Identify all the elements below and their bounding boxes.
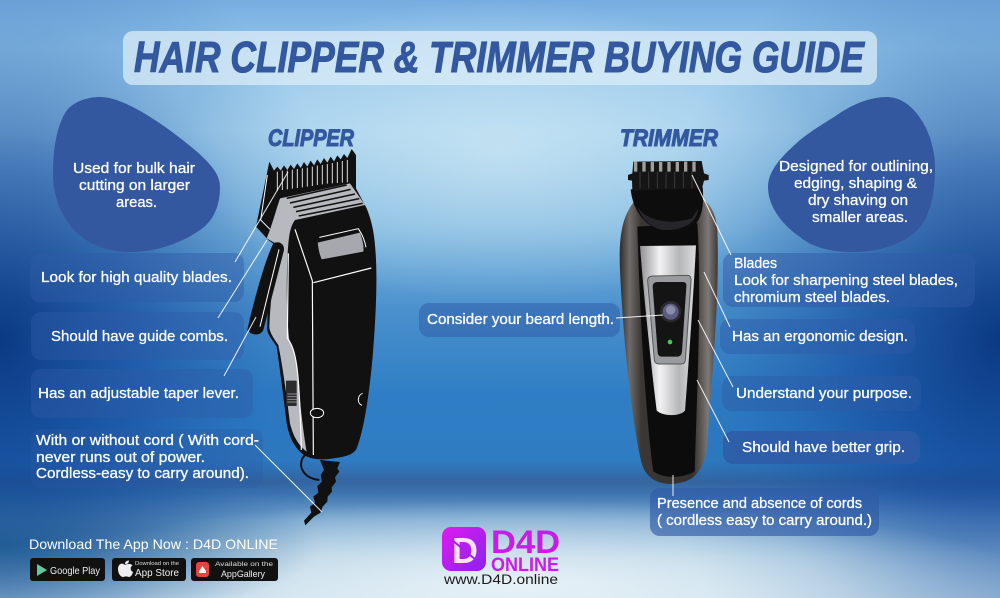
left feature pills xyxy=(30,253,263,488)
logo url: www.D4D.online xyxy=(443,571,558,587)
badge: appgallery: AppGallery xyxy=(221,569,265,580)
blob text xyxy=(73,161,195,211)
logo icon: D xyxy=(452,530,478,571)
logo wordmark: D4D xyxy=(491,524,560,560)
blob text: Designed for outlining, xyxy=(779,159,933,175)
blob text: smaller areas. xyxy=(812,210,908,226)
taper lever xyxy=(247,242,284,334)
blob text: Used for bulk hair xyxy=(73,161,195,177)
logo: D4D Online xyxy=(442,524,560,587)
panel: trimmer definition blob xyxy=(768,97,935,252)
clipper body xyxy=(256,149,376,459)
blob text xyxy=(779,159,933,226)
pill: blades: Look for sharpening steel blades, xyxy=(734,273,958,289)
blob text: cutting on larger xyxy=(79,178,190,194)
pill: cords xyxy=(650,488,879,536)
title banner xyxy=(123,31,877,85)
pill: blades xyxy=(723,253,975,307)
heading: clipper: CLIPPER xyxy=(268,125,355,152)
pill: ergonomic design: Has an ergonomic design. xyxy=(732,329,908,345)
right notch xyxy=(358,393,363,405)
highlight seams xyxy=(287,229,371,455)
side button xyxy=(310,408,324,418)
pill: cord: Cordless-easy to carry around). xyxy=(36,466,249,482)
silver panel xyxy=(640,245,696,415)
pill: purpose: Understand your purpose. xyxy=(736,386,912,402)
pill: cords: Presence and absence of cords xyxy=(657,496,862,512)
right feature pills xyxy=(650,253,975,536)
icon: hair clipper xyxy=(247,149,376,525)
pill: grip: Should have better grip. xyxy=(742,440,905,456)
badge: google play: Google Play xyxy=(50,565,101,577)
logo: D4D Online: ONLINE xyxy=(491,555,559,576)
badge: app store xyxy=(112,558,186,581)
pill: guide combs: Should have guide combs. xyxy=(51,329,228,345)
comb teeth xyxy=(277,160,347,191)
blob text: dry shaving on xyxy=(808,193,908,209)
icon: beard trimmer xyxy=(620,161,718,484)
app download text: Download The App Now : D4D ONLINE xyxy=(29,536,278,552)
pill: cords: ( cordless easy to carry around.) xyxy=(657,513,872,529)
pill: blades: Blades xyxy=(734,256,777,272)
pill: taper lever xyxy=(31,369,253,418)
pill: cord: With or without cord ( With cord- xyxy=(36,433,259,449)
heading: trimmer: TRIMMER xyxy=(620,125,719,152)
blob text: areas. xyxy=(116,195,157,211)
comb blade xyxy=(628,161,709,191)
switch window xyxy=(648,275,691,364)
pill: beard length: Consider your beard length. xyxy=(427,312,614,328)
vent lines xyxy=(287,185,363,216)
indicator light xyxy=(668,340,672,344)
pill: ergonomic design xyxy=(720,319,915,354)
callout lines xyxy=(218,172,733,512)
trimmer body xyxy=(620,200,718,484)
blob text: edging, shaping & xyxy=(794,176,917,192)
pill: purpose xyxy=(722,376,921,411)
pill: cord xyxy=(31,429,263,488)
black front face xyxy=(637,223,699,477)
trimmer head xyxy=(631,187,703,233)
cord xyxy=(301,455,340,525)
pill: high quality blades: Look for high quality blades. xyxy=(41,270,232,286)
pill: cord: never runs out of power. xyxy=(36,450,205,466)
pill: guide combs xyxy=(31,312,244,360)
badge: app store: Download on the xyxy=(135,561,179,567)
badge: app store: App Store xyxy=(135,567,179,579)
badge: google play xyxy=(30,558,105,581)
comb flank highlight xyxy=(261,175,270,229)
pill: beard length xyxy=(419,303,620,337)
badge: appgallery xyxy=(191,558,278,581)
display window xyxy=(318,229,366,259)
pill: blades: chromium steel blades. xyxy=(734,290,890,306)
slide switch xyxy=(286,381,297,406)
power button xyxy=(660,301,681,322)
pill: high quality blades xyxy=(30,253,244,302)
pill: grip xyxy=(723,431,920,464)
panel: clipper definition blob xyxy=(53,97,220,252)
badge: appgallery: Available on the xyxy=(215,561,273,568)
grey side plate xyxy=(267,183,365,452)
pill: taper lever: Has an adjustable taper lever. xyxy=(38,386,239,402)
